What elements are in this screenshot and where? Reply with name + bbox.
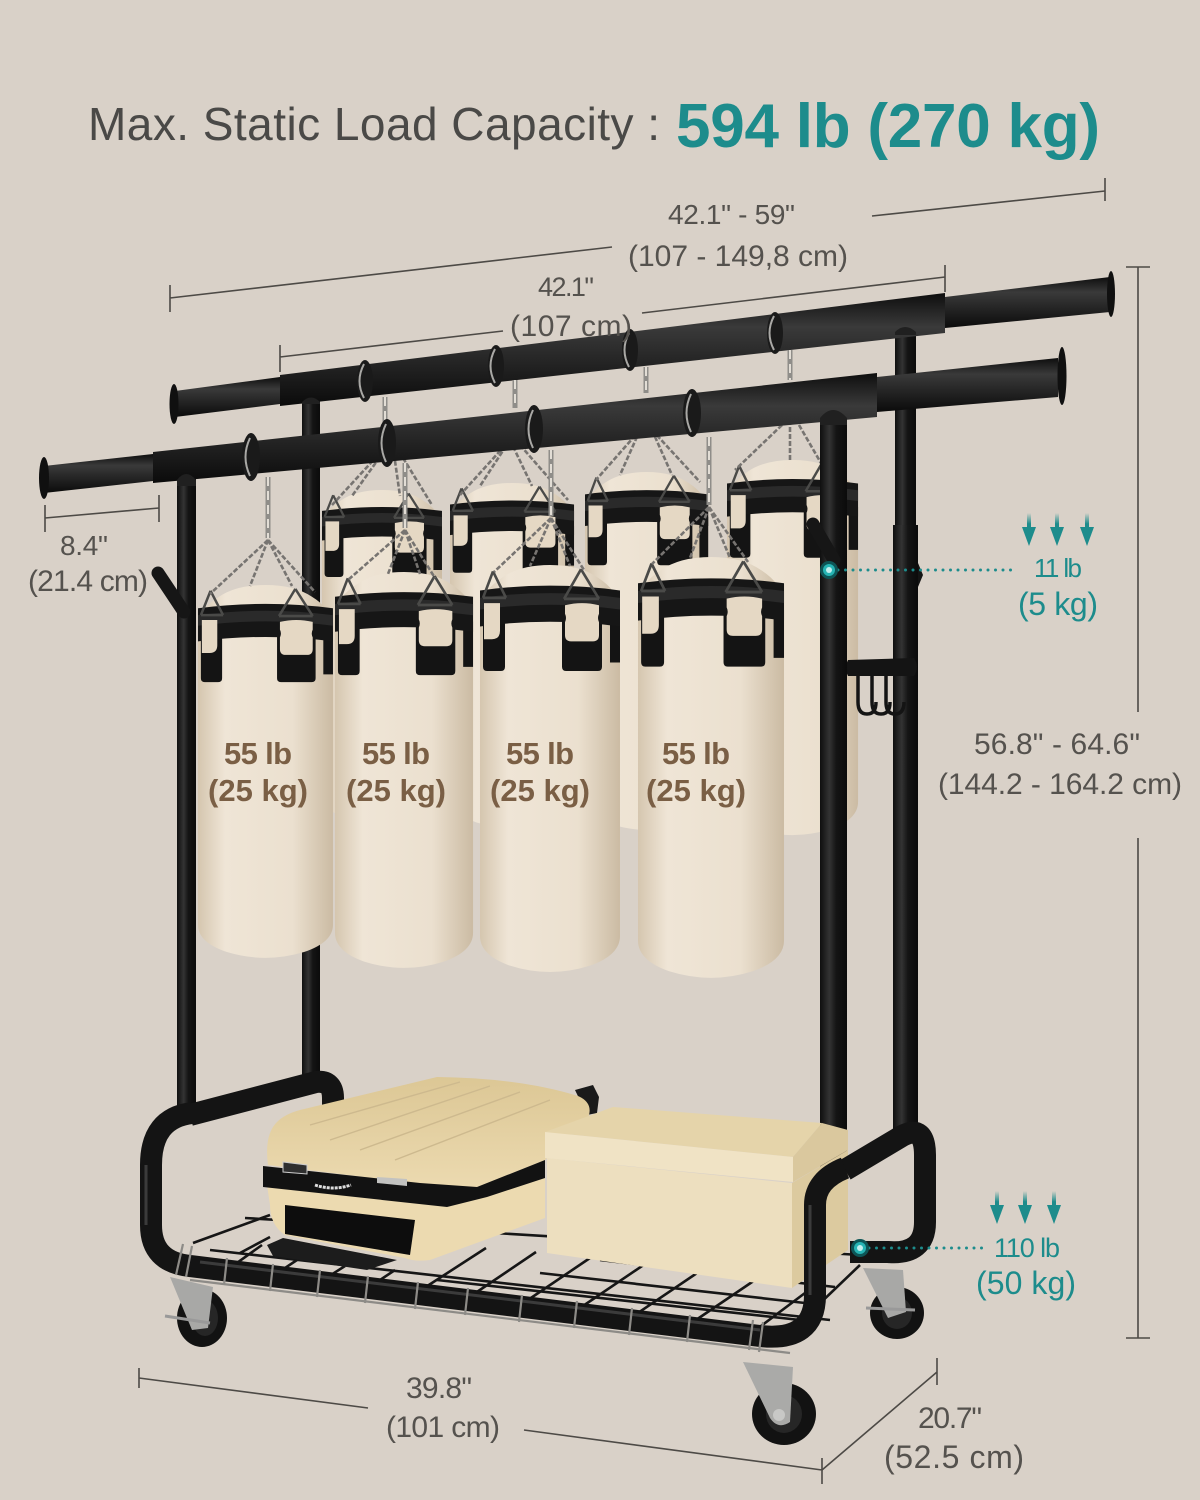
dimension: rail overhang: (21.4 cm) xyxy=(28,565,148,598)
weight label: (25 kg) xyxy=(646,773,746,808)
dimension: depth: (52.5 cm) xyxy=(884,1439,1024,1475)
rear punching bags xyxy=(322,350,858,835)
storage box xyxy=(545,1107,848,1288)
weight label: 55 lb xyxy=(662,736,730,771)
dimension: overall width: (107 - 149,8 cm) xyxy=(628,240,848,273)
dimension: rail width: 42.1" xyxy=(538,272,594,302)
wire shelf xyxy=(193,1215,860,1332)
casters xyxy=(165,1268,924,1445)
dimension: rail width: (107 cm) xyxy=(510,310,632,343)
pull handle xyxy=(267,1238,397,1270)
weight label: 55 lb xyxy=(224,736,292,771)
callout: base shelf load xyxy=(851,1191,1076,1301)
dimension: length xyxy=(139,1368,822,1484)
dimension: depth: 20.7" xyxy=(918,1402,982,1435)
weight label: (25 kg) xyxy=(346,773,446,808)
base frame xyxy=(146,1113,925,1337)
callout: base shelf load: 110 lb xyxy=(994,1233,1060,1263)
rear-left base tube xyxy=(190,1082,333,1115)
suitcase xyxy=(263,1077,599,1270)
rear bag 4 xyxy=(727,350,858,835)
weight label: 55 lb xyxy=(362,736,430,771)
front punching bags xyxy=(198,437,784,978)
side hook bar xyxy=(846,658,917,714)
dimension: overall width: 42.1" - 59" xyxy=(668,199,795,230)
wheel xyxy=(575,1085,599,1115)
rear bag 2 xyxy=(450,380,574,828)
bag 2 xyxy=(335,463,473,968)
dimension: length: 39.8" xyxy=(406,1372,472,1405)
dimension: overall width xyxy=(170,178,1105,312)
dimension: height: (144.2 - 164.2 cm) xyxy=(938,768,1182,801)
callout: base shelf load: (50 kg) xyxy=(976,1265,1076,1301)
handle recess xyxy=(285,1205,415,1255)
weight label: 55 lb xyxy=(506,736,574,771)
dimension: height xyxy=(938,267,1182,1338)
dimension: depth xyxy=(822,1358,1024,1475)
bag 4 xyxy=(638,437,784,978)
front rail xyxy=(39,327,1066,499)
weight label xyxy=(346,736,446,808)
dimension: height: 56.8" - 64.6" xyxy=(974,728,1140,761)
caster front right xyxy=(743,1362,816,1445)
weight label: (25 kg) xyxy=(208,773,308,808)
icon: down arrows xyxy=(990,1191,1061,1224)
title xyxy=(88,92,1100,161)
weight label xyxy=(646,736,746,808)
lower shell xyxy=(267,1170,545,1261)
callout: side hook load: 11 lb xyxy=(1034,553,1082,583)
left side hook xyxy=(158,573,184,612)
rear bag 3 xyxy=(585,367,708,830)
front frame posts xyxy=(158,408,847,1178)
dimension: length: (101 cm) xyxy=(386,1411,500,1444)
icon: down arrows xyxy=(1022,513,1094,546)
dimension: rail overhang: 8.4" xyxy=(60,530,108,561)
caster front left xyxy=(165,1277,227,1347)
weight label xyxy=(208,736,308,808)
rear frame xyxy=(170,271,1115,1137)
dimension: rail width xyxy=(280,265,945,372)
title: Max. Static Load Capacity : xyxy=(88,98,660,150)
right side hook on front post xyxy=(813,524,834,560)
weight label xyxy=(490,736,590,808)
callout: side hook load xyxy=(820,513,1098,622)
latch band xyxy=(263,1160,545,1207)
wire clips on front tube xyxy=(176,1244,790,1353)
weight label: (25 kg) xyxy=(490,773,590,808)
callout: side hook load: (5 kg) xyxy=(1018,586,1098,622)
rear bag 1 xyxy=(322,397,442,824)
title: 594 lb (270 kg) xyxy=(676,92,1100,161)
bag 3 xyxy=(480,450,620,972)
bag 1 xyxy=(198,477,333,958)
hanging rings xyxy=(242,312,783,481)
caster rear right xyxy=(863,1268,924,1339)
top shell xyxy=(267,1077,590,1188)
dimension: rail overhang xyxy=(28,495,159,598)
